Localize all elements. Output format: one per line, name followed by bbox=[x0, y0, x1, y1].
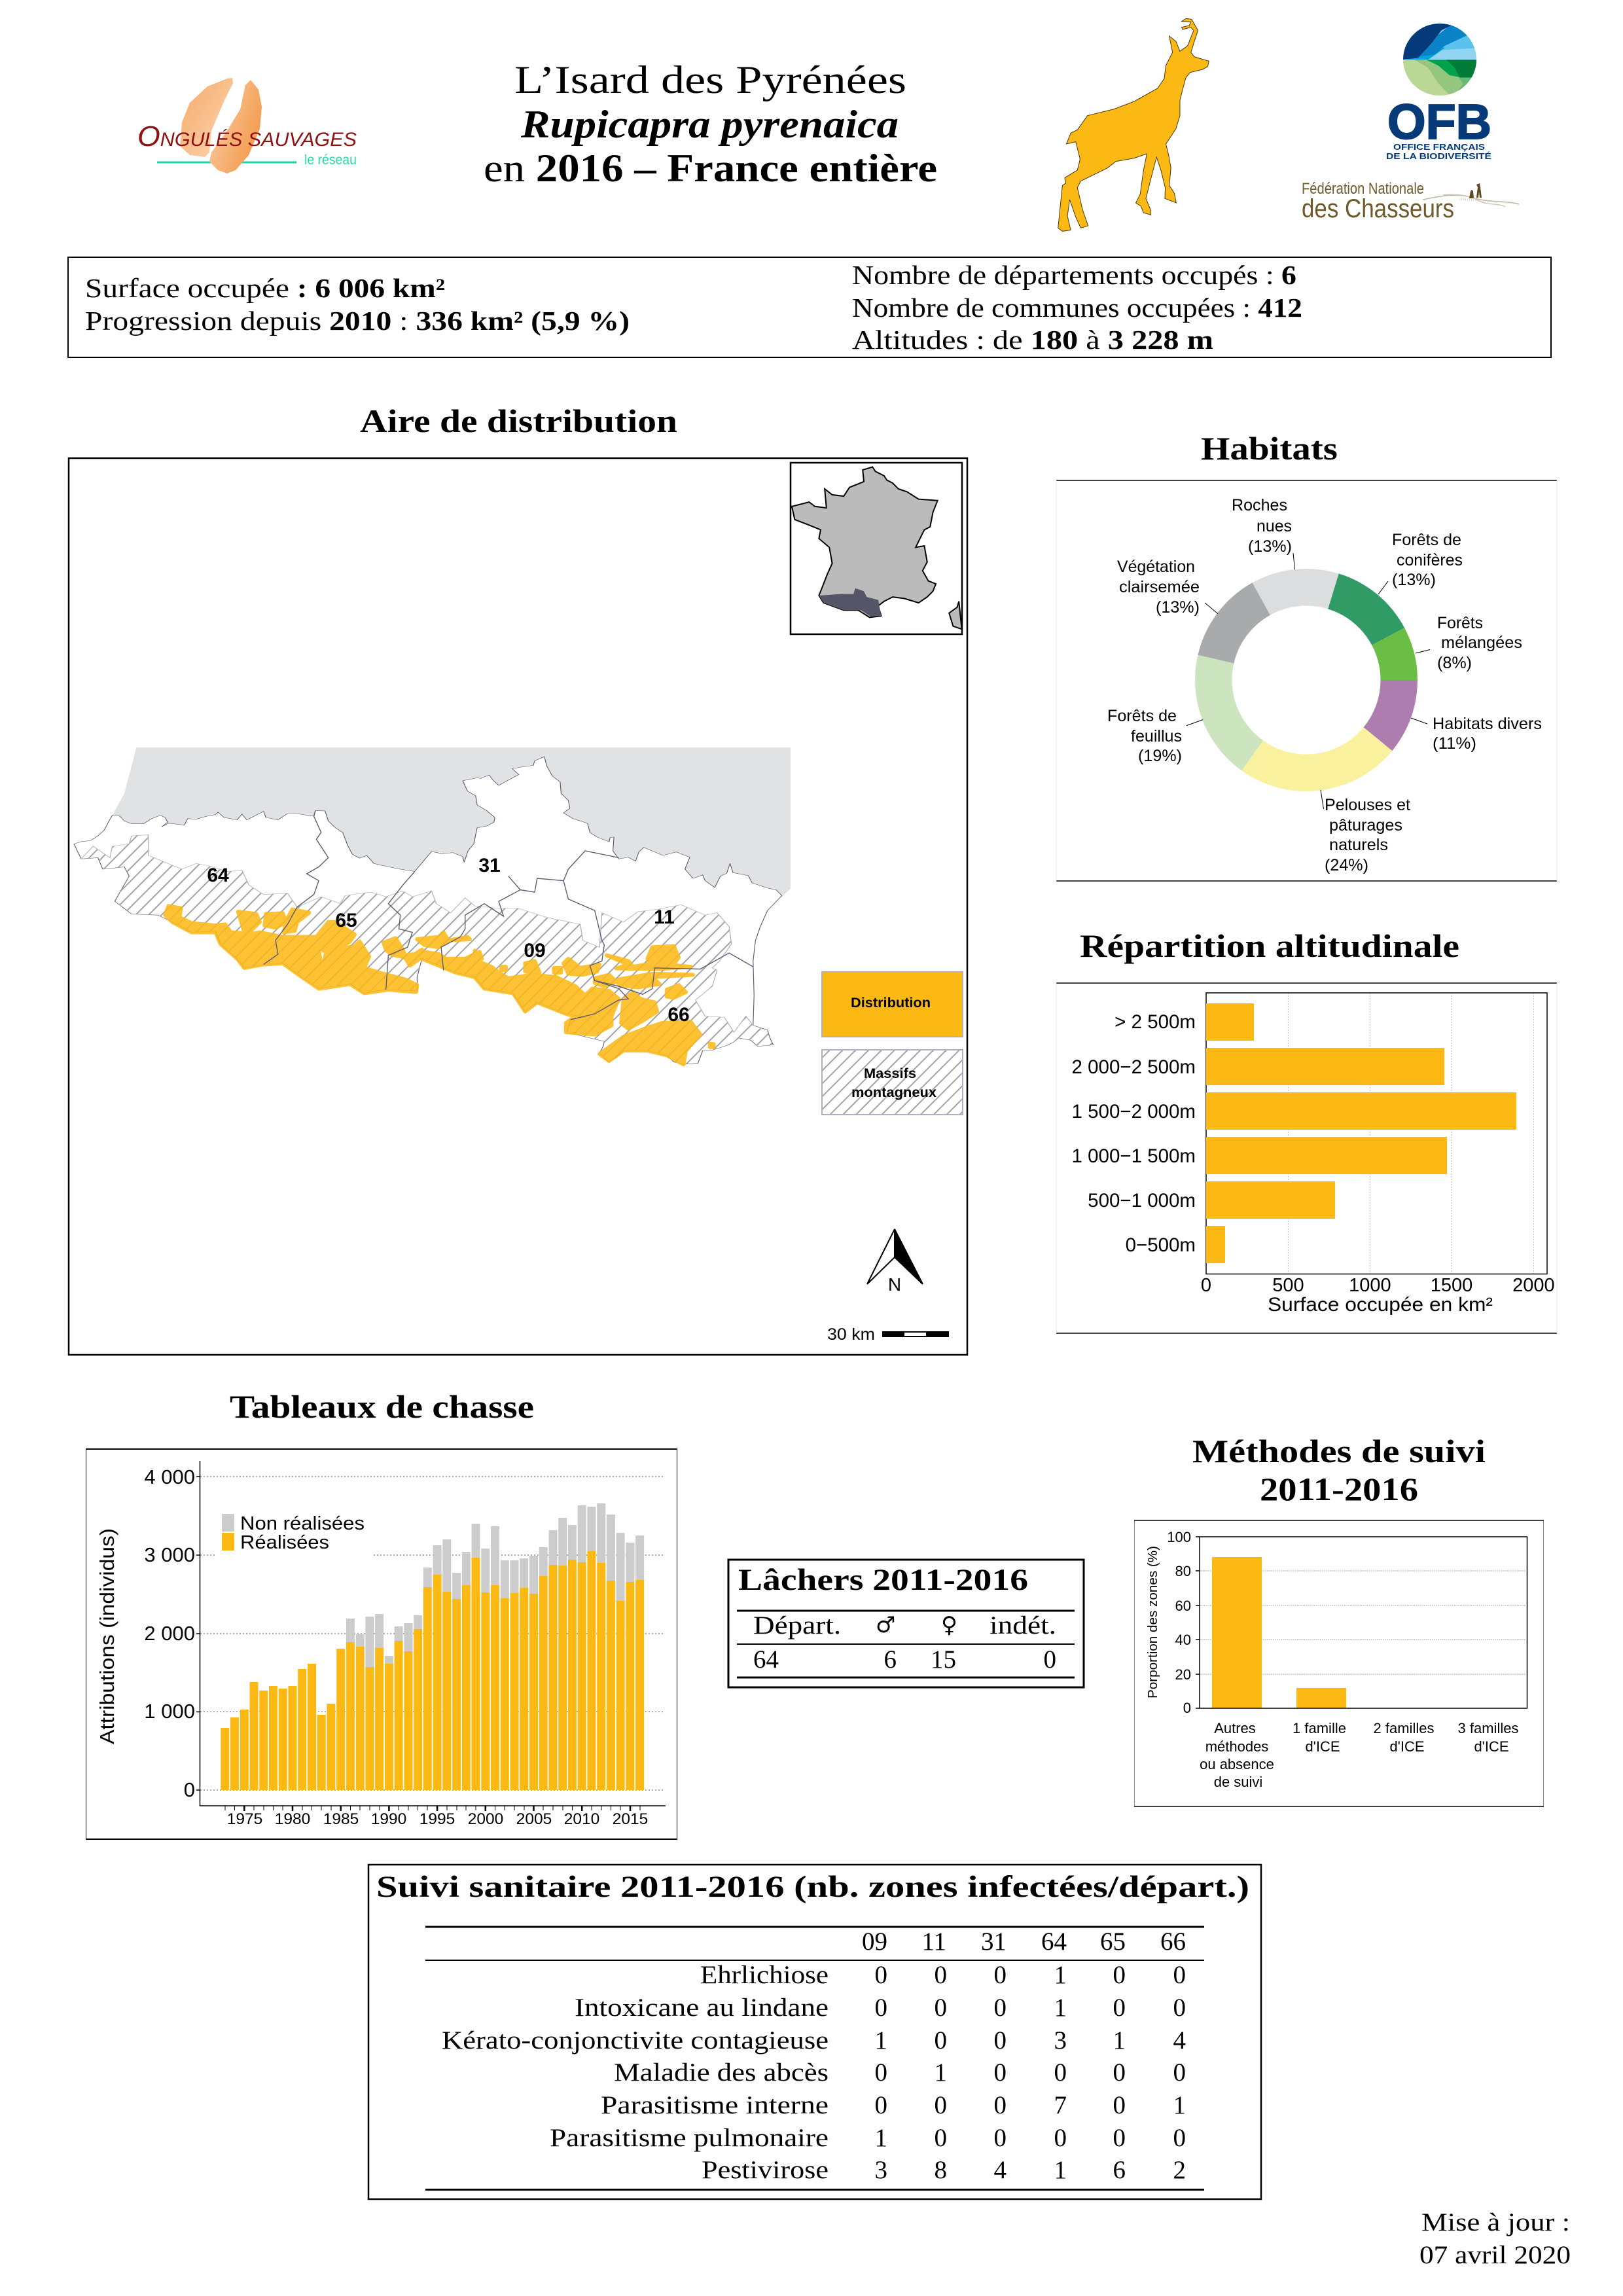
row values: 4 bbox=[1173, 2026, 1186, 2054]
row labels: Kérato-conjonctivite contagieuse bbox=[442, 2026, 829, 2054]
panel: distribution map bbox=[65, 458, 967, 1355]
x axis labels: 2015 bbox=[613, 1810, 648, 1828]
label: forêts mélangées: (8%) bbox=[1437, 654, 1472, 672]
text block: departments, communes, altitudes: Altitudes : de 180 à 3 228 m bbox=[852, 325, 1213, 355]
title bbox=[484, 58, 937, 190]
row values: 1 bbox=[1054, 1961, 1067, 1989]
row values: 8 bbox=[935, 2156, 947, 2184]
icon: north arrow bbox=[867, 1229, 923, 1295]
label: pelouses et pâturages naturels: (24%) bbox=[1325, 856, 1368, 874]
label: végétation clairsemée: (13%) bbox=[1156, 598, 1200, 617]
table row: 15 bbox=[931, 1645, 956, 1674]
table row: 64 bbox=[753, 1645, 779, 1674]
icon: isard silhouette bbox=[1058, 18, 1209, 231]
row values: 1 bbox=[1173, 2091, 1186, 2119]
map: neighbouring territory bbox=[113, 747, 791, 915]
inset: France locator bbox=[791, 463, 962, 634]
table header: indét. bbox=[990, 1611, 1056, 1640]
label: habitats divers: (11%) bbox=[1433, 734, 1476, 753]
row values: 0 bbox=[1173, 1961, 1186, 1989]
heading: Méthodes de suivi 2011-2016 bbox=[1192, 1433, 1486, 1507]
label: roches nues: nues bbox=[1257, 517, 1292, 535]
row values: 0 bbox=[993, 1961, 1007, 1989]
label: pelouses et pâturages naturels: pâturages bbox=[1329, 816, 1402, 834]
table header: 09 bbox=[862, 1928, 887, 1956]
x axis ticks bbox=[1201, 1275, 1555, 1296]
text block: surface and progression: Progression depuis 2010 : 336 km² (5,9 %) bbox=[85, 306, 630, 336]
y axis labels: 60 bbox=[1175, 1598, 1191, 1614]
legend: massifs montagneux: montagneux bbox=[851, 1085, 936, 1100]
y axis labels bbox=[1167, 1529, 1191, 1716]
label: habitats divers: Habitats divers bbox=[1433, 715, 1542, 733]
logo name bbox=[1302, 180, 1454, 223]
scale bar: 30 km bbox=[827, 1325, 875, 1344]
table header: 64 bbox=[1041, 1928, 1067, 1956]
label: forêts mélangées: Forêts bbox=[1437, 614, 1483, 632]
row values: 0 bbox=[1113, 2058, 1126, 2087]
y axis labels: 80 bbox=[1175, 1563, 1191, 1579]
label: forêts de conifères: (13%) bbox=[1392, 571, 1436, 589]
gridlines bbox=[1200, 1571, 1526, 1674]
row values: 3 bbox=[874, 2156, 887, 2184]
row values: 0 bbox=[1054, 2058, 1067, 2087]
table header: Départ. bbox=[753, 1611, 841, 1640]
chart legend: Non réalisées bbox=[240, 1513, 365, 1534]
x axis ticks: 500 bbox=[1272, 1275, 1304, 1296]
row values: 0 bbox=[1113, 2124, 1126, 2152]
row labels: Parasitisme pulmonaire bbox=[550, 2124, 829, 2152]
heading: Tableaux de chasse: Tableaux de chasse bbox=[230, 1388, 534, 1425]
logo acronym: OFB bbox=[1387, 94, 1491, 149]
row values: 0 bbox=[993, 2058, 1007, 2087]
row values: 1 bbox=[935, 2058, 947, 2087]
icon: hoof print bbox=[157, 78, 296, 173]
logo name: OFFICE FRANÇAIS bbox=[1393, 142, 1485, 152]
altitude class labels: > 2 500m bbox=[1115, 1011, 1196, 1033]
table: Lâchers 2011-2016 bbox=[728, 1560, 1084, 1687]
table row: 0 bbox=[1043, 1645, 1056, 1674]
x axis labels: 1975 bbox=[227, 1810, 262, 1828]
heading: Aire de distribution: Aire de distribution bbox=[360, 403, 677, 439]
x axis labels: 1980 bbox=[275, 1810, 310, 1828]
row values: 0 bbox=[1113, 2091, 1126, 2119]
row values: 0 bbox=[993, 2124, 1007, 2152]
x axis labels: 1995 bbox=[419, 1810, 455, 1828]
gridlines bbox=[200, 1477, 664, 1790]
label: forêts de conifères: conifères bbox=[1397, 551, 1463, 569]
text block: surface and progression bbox=[85, 273, 630, 336]
y axis labels: 20 bbox=[1175, 1666, 1191, 1683]
altitude class labels: 0−500m bbox=[1126, 1234, 1196, 1256]
heading: Répartition altitudinale: Répartition altitudinale bbox=[1080, 927, 1459, 964]
row values: 4 bbox=[993, 2156, 1007, 2184]
x axis labels bbox=[1200, 1720, 1518, 1790]
table header: ♀ bbox=[941, 1612, 957, 1638]
y axis labels: 4 000 bbox=[144, 1465, 195, 1488]
x axis labels: méthodes bbox=[1205, 1738, 1268, 1755]
inset: Corsica bbox=[949, 601, 962, 629]
altitude class labels: 1 500−2 000m bbox=[1072, 1101, 1196, 1122]
row values: 0 bbox=[1173, 2124, 1186, 2152]
table: suivi sanitaire bbox=[368, 1865, 1261, 2199]
panel: monitoring methods bar chart bbox=[1134, 1520, 1544, 1806]
text block: update date: 07 avril 2020 bbox=[1419, 2241, 1571, 2269]
map: department labels: 31 bbox=[478, 855, 501, 876]
method bars bbox=[1212, 1557, 1346, 1708]
x axis labels: d'ICE bbox=[1474, 1738, 1509, 1755]
heading: Habitats: Habitats bbox=[1201, 430, 1338, 467]
x axis labels: 2000 bbox=[468, 1810, 503, 1828]
map: Pyrenees departments bbox=[73, 747, 791, 1067]
label: végétation clairsemée: clairsemée bbox=[1119, 578, 1200, 596]
legend: distribution: Distribution bbox=[851, 996, 931, 1011]
map: department labels: 65 bbox=[335, 910, 357, 931]
plot frame and grid bbox=[1206, 993, 1547, 1274]
row values: 0 bbox=[1054, 2124, 1067, 2152]
altitude class labels: 2 000−2 500m bbox=[1072, 1056, 1196, 1078]
x axis labels: Autres bbox=[1214, 1720, 1256, 1736]
label: pelouses et pâturages naturels: naturels bbox=[1329, 836, 1388, 854]
y axis title: Attributions (individus) bbox=[96, 1528, 118, 1744]
x axis labels bbox=[227, 1810, 648, 1828]
row values: 0 bbox=[935, 2091, 947, 2119]
row values: 0 bbox=[993, 1994, 1007, 2022]
row values: 0 bbox=[874, 1994, 887, 2022]
logo wordmark: ONGULÉS SAUVAGES bbox=[137, 120, 357, 152]
title: L’Isard des Pyrénées bbox=[514, 58, 906, 101]
text block: update date: Mise à jour : bbox=[1421, 2208, 1570, 2236]
title: Rupicapra pyrenaica bbox=[520, 103, 899, 146]
map: massif outline bbox=[81, 834, 753, 1032]
row values: 0 bbox=[935, 2124, 947, 2152]
map: massif hatching bbox=[88, 835, 772, 1064]
table header: ♂ bbox=[876, 1612, 895, 1638]
logo name: Fédération Nationale bbox=[1302, 180, 1424, 198]
label: forêts mélangées: mélangées bbox=[1441, 634, 1522, 652]
row labels: Intoxicane au lindane bbox=[575, 1994, 829, 2022]
y axis labels: 40 bbox=[1175, 1632, 1191, 1648]
row values: 7 bbox=[1054, 2091, 1067, 2119]
row values: 1 bbox=[874, 2026, 887, 2054]
x axis labels: 1990 bbox=[371, 1810, 406, 1828]
legend: massifs montagneux: Massifs bbox=[864, 1066, 916, 1081]
row values: 0 bbox=[935, 1994, 947, 2022]
altitude class labels bbox=[1072, 1011, 1196, 1256]
row values bbox=[874, 1961, 1186, 2184]
y axis labels: 1 000 bbox=[144, 1700, 195, 1723]
row values: 1 bbox=[874, 2124, 887, 2152]
x axis labels: d'ICE bbox=[1389, 1738, 1425, 1755]
y axis labels: 0 bbox=[184, 1778, 195, 1801]
map: department labels: 11 bbox=[654, 906, 675, 928]
label: forêts mélangées bbox=[1437, 614, 1522, 672]
row labels: Pestivirose bbox=[702, 2156, 829, 2184]
x axis labels: 2010 bbox=[564, 1810, 599, 1828]
logo name: des Chasseurs bbox=[1302, 194, 1454, 223]
y axis title: Porportion des zones (%) bbox=[1146, 1546, 1160, 1698]
y axis labels: 0 bbox=[1183, 1700, 1191, 1716]
panel: hunting bar chart bbox=[86, 1449, 677, 1839]
row values: 0 bbox=[1113, 1994, 1126, 2022]
row values: 0 bbox=[1173, 2058, 1186, 2087]
legend: distribution bbox=[822, 972, 963, 1037]
table row: 6 bbox=[883, 1645, 897, 1674]
row values: 1 bbox=[1054, 1994, 1067, 2022]
plot frame bbox=[1196, 1537, 1527, 1708]
row values: 0 bbox=[935, 2026, 947, 2054]
label: pelouses et pâturages naturels: Pelouses et bbox=[1325, 796, 1410, 814]
label: forêts de feuillus: feuillus bbox=[1131, 727, 1182, 745]
map: department labels: 09 bbox=[524, 940, 546, 961]
x axis labels: 1 famille bbox=[1293, 1720, 1346, 1736]
altitude bars bbox=[1206, 1003, 1516, 1263]
icon: north arrow: N bbox=[888, 1274, 901, 1295]
altitude class labels: 1 000−1 500m bbox=[1072, 1145, 1196, 1167]
row values: 0 bbox=[935, 1961, 947, 1989]
label: forêts de conifères: Forêts de bbox=[1392, 531, 1461, 549]
logo name: DE LA BIODIVERSITÉ bbox=[1386, 151, 1491, 161]
row values: 6 bbox=[1113, 2156, 1126, 2184]
logo: Ongulés sauvages bbox=[137, 78, 357, 173]
text block: departments, communes, altitudes: Nombre de départements occupés : 6 bbox=[852, 260, 1296, 290]
table header bbox=[753, 1611, 1056, 1640]
donut leader lines bbox=[1186, 553, 1430, 809]
row values: 0 bbox=[993, 2026, 1007, 2054]
x axis labels: 2005 bbox=[516, 1810, 552, 1828]
label: forêts de conifères bbox=[1392, 531, 1463, 589]
chart legend: Réalisées bbox=[240, 1532, 329, 1553]
logo: OFB bbox=[1386, 22, 1491, 161]
y axis labels: 100 bbox=[1167, 1529, 1191, 1545]
text block: departments, communes, altitudes: Nombre de communes occupées : 412 bbox=[852, 293, 1302, 323]
title: en 2016 – France entière bbox=[484, 147, 937, 190]
label: forêts de feuillus bbox=[1107, 707, 1182, 765]
map: distribution areas bbox=[165, 906, 714, 1064]
map: department labels bbox=[207, 855, 690, 1026]
panel: altitude bar chart bbox=[1056, 983, 1557, 1333]
table header: 11 bbox=[921, 1928, 946, 1956]
label: forêts de feuillus: Forêts de bbox=[1107, 707, 1177, 725]
legend: massifs montagneux bbox=[822, 1050, 963, 1115]
row values: 1 bbox=[1054, 2156, 1067, 2184]
map: department boundaries bbox=[264, 811, 753, 1020]
x axis title: Surface occupée en km² bbox=[1268, 1294, 1493, 1316]
bars: réalisées bbox=[221, 1551, 644, 1790]
x axis labels: 1985 bbox=[323, 1810, 359, 1828]
y axis labels: 2 000 bbox=[144, 1622, 195, 1645]
table title: Lâchers 2011-2016 bbox=[738, 1563, 1028, 1597]
table row bbox=[753, 1645, 1056, 1674]
row values: 1 bbox=[1113, 2026, 1126, 2054]
text block: departments, communes, altitudes bbox=[852, 260, 1302, 355]
chart legend bbox=[215, 1509, 372, 1558]
map: department labels: 64 bbox=[207, 865, 229, 886]
label: roches nues bbox=[1232, 496, 1292, 556]
label: pelouses et pâturages naturels bbox=[1325, 796, 1410, 874]
label: végétation clairsemée bbox=[1117, 558, 1200, 617]
table header: 31 bbox=[981, 1928, 1007, 1956]
inset: Pyrenees highlight bbox=[819, 588, 881, 617]
text block: surface and progression: Surface occupée : 6 006 km² bbox=[85, 273, 445, 303]
x axis labels: 3 familles bbox=[1458, 1720, 1518, 1736]
text block: update date bbox=[1419, 2208, 1571, 2269]
row values: 0 bbox=[874, 2091, 887, 2119]
x axis ticks: 2000 bbox=[1512, 1275, 1555, 1296]
panel: habitats donut bbox=[1056, 480, 1557, 881]
x axis labels: 2 familles bbox=[1374, 1720, 1434, 1736]
label: végétation clairsemée: Végétation bbox=[1117, 558, 1195, 576]
scale bar bbox=[827, 1325, 949, 1344]
x axis labels: d'ICE bbox=[1305, 1738, 1340, 1755]
x axis labels: de suivi bbox=[1214, 1774, 1262, 1790]
row values: 0 bbox=[1173, 1994, 1186, 2022]
label: habitats divers bbox=[1433, 715, 1542, 753]
table header: 65 bbox=[1100, 1928, 1126, 1956]
row values: 0 bbox=[993, 2091, 1007, 2119]
row labels bbox=[442, 1961, 829, 2184]
altitude class labels: 500−1 000m bbox=[1088, 1190, 1196, 1211]
table title: Suivi sanitaire 2011-2016 (nb. zones infectées/départ.) bbox=[376, 1870, 1249, 1904]
row values: 2 bbox=[1173, 2156, 1186, 2184]
x axis labels: ou absence bbox=[1200, 1756, 1274, 1772]
x axis ticks: 1000 bbox=[1349, 1275, 1391, 1296]
inset: mainland France bbox=[792, 467, 938, 617]
panel: key figures bbox=[68, 257, 1551, 357]
donut chart bbox=[1195, 569, 1418, 791]
logo: Fédération Nationale des Chasseurs bbox=[1302, 180, 1519, 223]
map: departments outline bbox=[74, 757, 782, 1064]
x axis ticks: 0 bbox=[1201, 1275, 1211, 1296]
logo name bbox=[1386, 142, 1491, 161]
heading: Méthodes de suivi 2011-2016: 2011-2016 bbox=[1260, 1471, 1418, 1507]
y axis labels bbox=[144, 1465, 195, 1801]
icon: hunters on a hill bbox=[1423, 183, 1519, 207]
row values: 3 bbox=[1054, 2026, 1067, 2054]
bars: non réalisées bbox=[346, 1503, 644, 1667]
logo tagline: le réseau bbox=[304, 152, 357, 168]
row labels: Maladie des abcès bbox=[614, 2058, 829, 2087]
heading: Méthodes de suivi 2011-2016: Méthodes de suivi bbox=[1192, 1433, 1486, 1469]
row labels: Parasitisme interne bbox=[601, 2091, 829, 2119]
icon: OFB landscape disc bbox=[1401, 22, 1478, 97]
label: roches nues: Roches bbox=[1232, 496, 1287, 514]
map: department labels: 66 bbox=[668, 1004, 690, 1026]
row labels: Ehrlichiose bbox=[700, 1961, 829, 1989]
y axis labels: 3 000 bbox=[144, 1543, 195, 1566]
table header bbox=[862, 1928, 1186, 1956]
row values: 0 bbox=[874, 1961, 887, 1989]
label: forêts de feuillus: (19%) bbox=[1138, 747, 1182, 765]
row values: 0 bbox=[1113, 1961, 1126, 1989]
label: roches nues: (13%) bbox=[1248, 537, 1292, 556]
axes bbox=[196, 1461, 666, 1811]
row values: 0 bbox=[874, 2058, 887, 2087]
x axis ticks: 1500 bbox=[1431, 1275, 1472, 1296]
table header: 66 bbox=[1160, 1928, 1186, 1956]
